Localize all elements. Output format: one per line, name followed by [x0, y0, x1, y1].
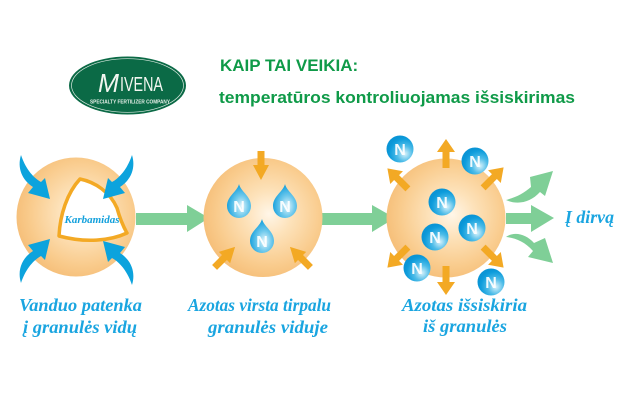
title: how it works: KAIP TAI VEIKIA:: [220, 56, 358, 75]
granule sphere: [16, 158, 136, 276]
arrow: green, stage 1 to 2: [136, 205, 209, 232]
label: stage 1: Vanduo patenka: [19, 295, 142, 315]
logo: Mivena: M: [98, 68, 119, 98]
icon: orange arrows inward: [209, 151, 316, 273]
label: stage 2: Azotas virsta tirpalu: [187, 295, 331, 315]
icon: nitrogen balls: [386, 136, 504, 296]
label: stage 1: į granulės vidų: [22, 317, 137, 337]
label: stage 3: iš granulės: [423, 316, 507, 336]
panel: stage 3 granule releasing nitrogen: [381, 136, 510, 296]
label: stage 2: [187, 295, 331, 337]
core label: Karbamidas: [63, 214, 120, 226]
granule sphere: [204, 158, 322, 277]
panel: stage 2 granule with nitrogen solution: [204, 151, 322, 277]
label: to soil: Į dirvą: [564, 207, 614, 227]
arrows: green, out to soil: [506, 171, 554, 263]
logo: Mivena: IVENA: [120, 74, 163, 96]
panel: stage 1 granule with water entering: [16, 155, 136, 285]
urea core: [59, 179, 127, 240]
logo: Mivena: SPECIALTY FERTILIZER COMPANY: [90, 100, 170, 106]
icon: nitrogen drops: [227, 184, 297, 253]
icon: orange arrows outward: [381, 139, 510, 295]
label: stage 3: [401, 295, 527, 336]
label: stage 1: [19, 295, 142, 337]
label: stage 3: Azotas išsiskiria: [401, 295, 527, 315]
logo: Mivena: [69, 56, 186, 114]
subtitle: temperatūros kontroliuojamas išsiskirimas: [219, 88, 575, 107]
icon: water arrows inward: [20, 155, 133, 285]
label: stage 2: granulės viduje: [207, 317, 328, 337]
arrow: green, stage 2 to 3: [322, 205, 395, 232]
granule sphere: [386, 158, 506, 278]
